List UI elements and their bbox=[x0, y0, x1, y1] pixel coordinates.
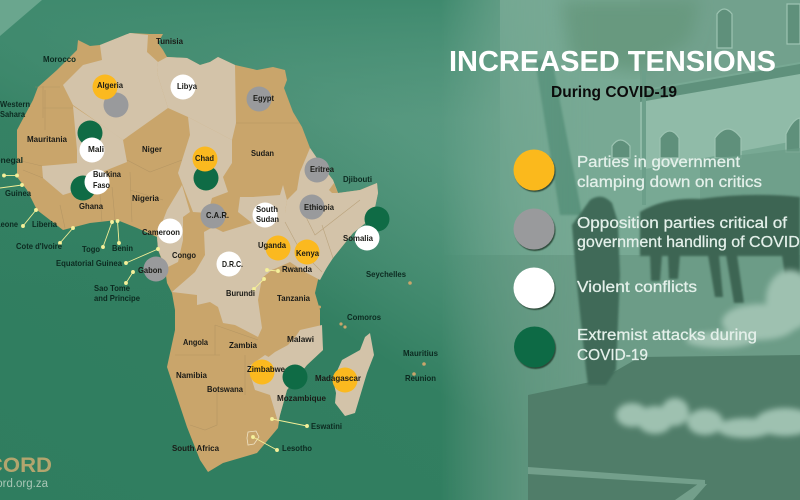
map: country labels on land: Somalia bbox=[343, 233, 373, 243]
map: country labels on land: South Africa bbox=[172, 443, 219, 453]
map: country labels on land: Tanzania bbox=[277, 293, 310, 303]
map: small islands bbox=[318, 281, 426, 376]
map: country labels on ocean: Benin bbox=[112, 243, 133, 253]
map: country labels on ocean: Mauritius bbox=[403, 348, 438, 358]
map: country labels on ocean: Lesotho bbox=[282, 443, 312, 453]
legend: extremist attacks: COVID-19 bbox=[577, 347, 648, 364]
map: country labels on ocean: Liberia bbox=[32, 219, 57, 229]
map: continent base bbox=[17, 33, 378, 472]
map: country labels on land: Tunisia bbox=[156, 36, 183, 46]
map: country labels on land: Niger bbox=[142, 144, 163, 154]
map: country labels on land: Malawi bbox=[287, 334, 314, 344]
map: country labels on ocean: Equatorial Guinea bbox=[56, 258, 122, 268]
map: country labels on land: Zambia bbox=[229, 340, 257, 350]
map: extremist attack markers bbox=[70, 120, 390, 390]
legend: extremist attacks: Extremist attacks during bbox=[577, 327, 757, 344]
map: country labels on land: Rwanda bbox=[282, 264, 312, 274]
map: opposition party markers bbox=[104, 86, 330, 282]
map: country labels on ocean: and Principe bbox=[94, 293, 140, 303]
map: country labels on land: Cameroon bbox=[142, 227, 180, 237]
map: country labels on ocean: Sao Tome bbox=[94, 283, 130, 293]
map: country labels on land bbox=[27, 36, 373, 453]
map: country labels on land: Mauritania bbox=[27, 134, 67, 144]
legend: opposition parties: Opposition parties critical of bbox=[577, 215, 788, 232]
legend bbox=[514, 150, 800, 368]
map: country labels on ocean: Seychelles bbox=[366, 269, 406, 279]
subtitle: During COVID-19 bbox=[551, 84, 677, 101]
map: country labels on land: Eritrea bbox=[310, 164, 334, 174]
map: country labels on land: Algeria bbox=[97, 80, 123, 90]
legend: government clampdown: Parties in government bbox=[577, 154, 741, 171]
map: light-toned countries bbox=[42, 33, 378, 422]
legend: opposition parties bbox=[514, 208, 800, 251]
map: leader lines bbox=[0, 174, 308, 452]
photo: arched windows bbox=[612, 4, 800, 158]
title: INCREASED TENSIONS bbox=[449, 46, 776, 78]
map: Djibouti bbox=[329, 183, 338, 193]
map: country labels on land: Angola bbox=[183, 337, 208, 347]
map: country labels on land: South bbox=[256, 204, 278, 214]
map: country labels on ocean: Eswatini bbox=[311, 421, 342, 431]
map: country labels on land: Mozambique bbox=[277, 393, 326, 403]
map: country labels on land: Libya bbox=[177, 81, 197, 91]
photo: road bbox=[528, 355, 800, 500]
map: government clampdown markers bbox=[92, 74, 358, 392]
map: country labels on ocean: Western bbox=[0, 99, 30, 109]
map: country labels on land: Ethiopia bbox=[304, 202, 334, 212]
map: country labels on land: Botswana bbox=[207, 384, 243, 394]
photo: crowd bbox=[640, 195, 800, 303]
map: country labels on ocean: Morocco bbox=[43, 54, 76, 64]
map: country labels on land: Egypt bbox=[253, 93, 274, 103]
map: country labels on land: Sudan bbox=[251, 148, 274, 158]
map of Africa bbox=[0, 33, 438, 472]
map: country labels on land: D.R.C. bbox=[222, 259, 243, 269]
map: country labels on land: Chad bbox=[195, 153, 214, 163]
legend: violent conflicts bbox=[514, 268, 697, 308]
map: Lesotho outline bbox=[247, 431, 259, 445]
map: country labels on land: Namibia bbox=[176, 370, 207, 380]
map: country labels on land: Burkina bbox=[93, 169, 121, 179]
photo: pavement bbox=[508, 255, 800, 500]
map: borders bbox=[17, 86, 360, 430]
photo: tree trunk bbox=[535, 60, 582, 215]
map: country labels on land: Madagascar bbox=[315, 373, 362, 383]
map: country labels on land: Burundi bbox=[226, 288, 255, 298]
map: Madagascar bbox=[333, 333, 374, 416]
map: country labels on land: Kenya bbox=[296, 248, 319, 258]
map: country labels on ocean: Togo bbox=[82, 244, 100, 254]
map: country labels on land: Ghana bbox=[79, 201, 103, 211]
map: country labels on land: Faso bbox=[93, 180, 110, 190]
map: country labels on ocean: Comoros bbox=[347, 312, 381, 322]
map: country labels on ocean bbox=[0, 54, 438, 453]
background photo: protest street bbox=[420, 0, 800, 500]
map: violent conflict markers bbox=[80, 74, 380, 276]
map: country labels on ocean: Sahara bbox=[0, 109, 25, 119]
map: country labels on land: Congo bbox=[172, 250, 196, 260]
map: country labels on land: Mali bbox=[88, 144, 104, 154]
legend: violent conflicts: Violent conflicts bbox=[577, 279, 697, 296]
photo: standing figure bbox=[572, 197, 620, 385]
map: country labels on land: Gabon bbox=[138, 265, 162, 275]
photo: upper scene fading into green bbox=[420, 0, 800, 500]
map: country labels on land: Zimbabwe bbox=[247, 364, 285, 374]
map: country labels on land: Uganda bbox=[258, 240, 286, 250]
map: country labels on ocean: Cote d'Ivoire bbox=[16, 241, 62, 251]
map: country labels on ocean: Guinea bbox=[5, 188, 31, 198]
map: country labels on land: C.A.R. bbox=[206, 210, 229, 220]
map: country labels on land: Sudan bbox=[256, 214, 279, 224]
legend: government clampdown: clamping down on critics bbox=[577, 174, 762, 191]
legend: extremist attacks bbox=[514, 326, 757, 368]
map: country labels on land: Nigeria bbox=[132, 193, 159, 203]
legend: government clampdown bbox=[514, 150, 762, 191]
logo bbox=[0, 454, 52, 490]
map: country labels on ocean: Reunion bbox=[405, 373, 436, 383]
map: country labels on ocean: Djibouti bbox=[343, 174, 372, 184]
photo: tear gas smoke bbox=[616, 270, 800, 438]
